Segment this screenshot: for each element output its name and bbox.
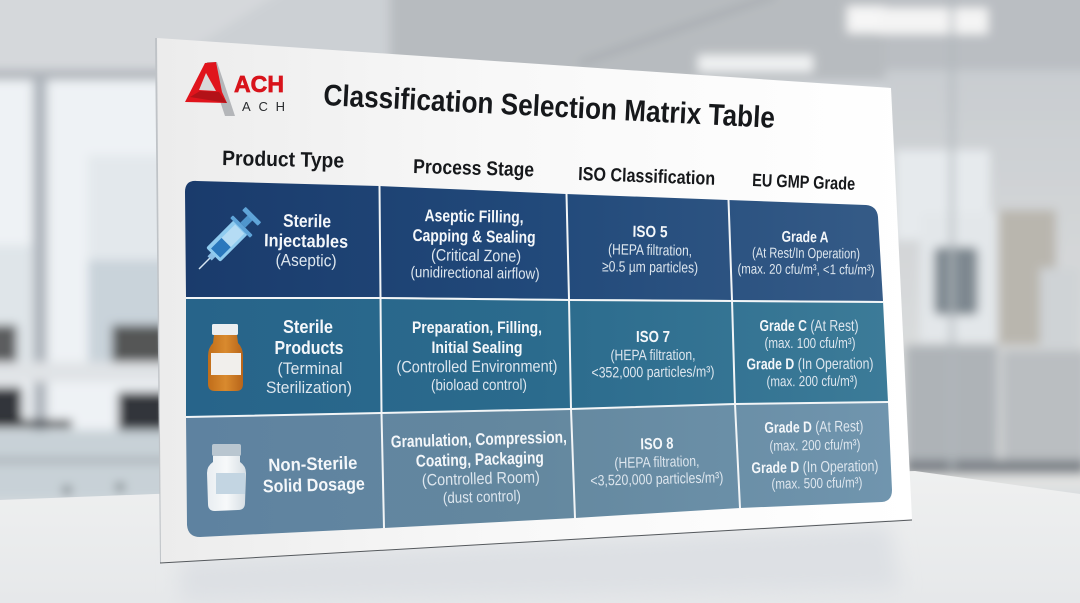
row 2: GMP text: (max. 100 cfu/m³) — [764, 336, 856, 352]
table surface — [0, 471, 1080, 603]
row 2: sterile products text: (Terminal — [278, 359, 342, 378]
row 2: GMP text: Grade D (In Operation) — [746, 356, 874, 373]
grid lines — [186, 186, 888, 528]
row 3: GMP text: (max. 200 cfu/m³) — [769, 437, 861, 455]
column headers — [222, 147, 856, 194]
row 3: GMP text: Grade D (In Operation) — [751, 458, 879, 477]
row 2 background — [186, 297, 888, 417]
row 2: GMP text: Grade C (At Rest) — [760, 318, 858, 335]
row 3: process stage text: (dust control) — [443, 488, 521, 507]
ceiling — [0, 0, 1080, 90]
row 2: process stage text: (Controlled Environment) — [396, 358, 558, 376]
row 1: sterile injectables text: Injectables — [264, 230, 348, 252]
row 1: GMP text: Grade A — [781, 229, 829, 246]
row 2: process stage text: Preparation, Filling, — [412, 318, 542, 337]
column headers: EU GMP Grade — [752, 170, 856, 194]
row 1: GMP text — [737, 229, 875, 277]
row 2: sterile products text: Sterilization) — [266, 378, 352, 397]
row 1: process stage text — [410, 206, 540, 283]
row 3: ISO text — [590, 436, 724, 490]
logo: ACH: ACH — [242, 99, 285, 114]
column headers: ISO Classification — [578, 164, 715, 190]
row 3: non-sterile text: Non-Sterile — [268, 453, 358, 475]
title: Classification Selection Matrix Table — [323, 79, 776, 135]
row 2: sterile products text: Products — [274, 338, 344, 358]
row 1: ISO text — [602, 224, 698, 277]
row 2: process stage text: Initial Sealing — [432, 338, 522, 357]
row 1: ISO text: (HEPA filtration, — [608, 241, 692, 260]
table matrix — [185, 181, 892, 537]
row 3: process stage text: (Controlled Room) — [422, 468, 540, 490]
row 2: GMP text — [746, 318, 874, 390]
row 3: process stage text: Coating, Packaging — [416, 448, 544, 471]
panel: matrix board — [155, 38, 912, 563]
icon: white bottle — [207, 444, 246, 511]
row 3: ISO text: <3,520,000 particles/m³) — [590, 469, 724, 490]
row 1: GMP text: (At Rest/In Operation) — [752, 245, 860, 263]
column headers: Product Type — [222, 147, 344, 173]
row 1: ISO text: ISO 5 — [632, 224, 668, 241]
meeting table and chairs — [0, 325, 17, 367]
row 3: process stage text — [391, 428, 567, 507]
column headers: Process Stage — [413, 156, 534, 181]
row 1: GMP text: (max. 20 cfu/m³, <1 cfu/m³) — [737, 261, 875, 277]
row 3: non-sterile text — [263, 453, 365, 496]
row 1: process stage text: (unidirectional airflow) — [410, 264, 540, 283]
row 1: process stage text: Aseptic Filling, — [424, 206, 524, 227]
row 3: process stage text: Granulation, Compression, — [391, 428, 567, 451]
icon: amber bottle — [208, 324, 243, 391]
row 1: process stage text: Capping & Sealing — [412, 226, 536, 247]
row 2: ISO text — [591, 329, 715, 382]
row 3: GMP text — [751, 418, 879, 493]
row 3: GMP text: (max. 500 cfu/m³) — [771, 475, 863, 493]
clean room — [885, 60, 1080, 490]
row 3 background — [186, 402, 892, 537]
row 1 background — [185, 181, 883, 301]
icon: syringe — [189, 205, 263, 279]
row 1: process stage text: (Critical Zone) — [431, 246, 521, 266]
row 2: process stage text — [396, 318, 558, 394]
row 2: sterile products text: Sterile — [283, 317, 333, 337]
row 1: sterile injectables text: Sterile — [283, 211, 331, 231]
row 1: sterile injectables text — [264, 211, 348, 270]
logo: ACH — [185, 62, 285, 116]
row 3: ISO text: (HEPA filtration, — [614, 453, 700, 472]
row 2: sterile products text — [266, 317, 352, 397]
row 2: GMP text: (max. 200 cfu/m³) — [766, 374, 858, 390]
row 3: ISO text: ISO 8 — [640, 436, 674, 453]
row 1: ISO text: ≥0.5 µm particles) — [602, 258, 698, 277]
row 2: ISO text: ISO 7 — [636, 329, 670, 346]
row 1: sterile injectables text: (Aseptic) — [275, 251, 337, 270]
row 3: GMP text: Grade D (At Rest) — [764, 418, 864, 437]
row 2: ISO text: (HEPA filtration, — [610, 347, 696, 364]
row 2: ISO text: <352,000 particles/m³) — [591, 363, 715, 382]
row 2: process stage text: (bioload control) — [431, 377, 527, 394]
row 3: non-sterile text: Solid Dosage — [263, 474, 365, 496]
logo: ACH: ACH — [234, 71, 284, 97]
window — [0, 80, 180, 500]
